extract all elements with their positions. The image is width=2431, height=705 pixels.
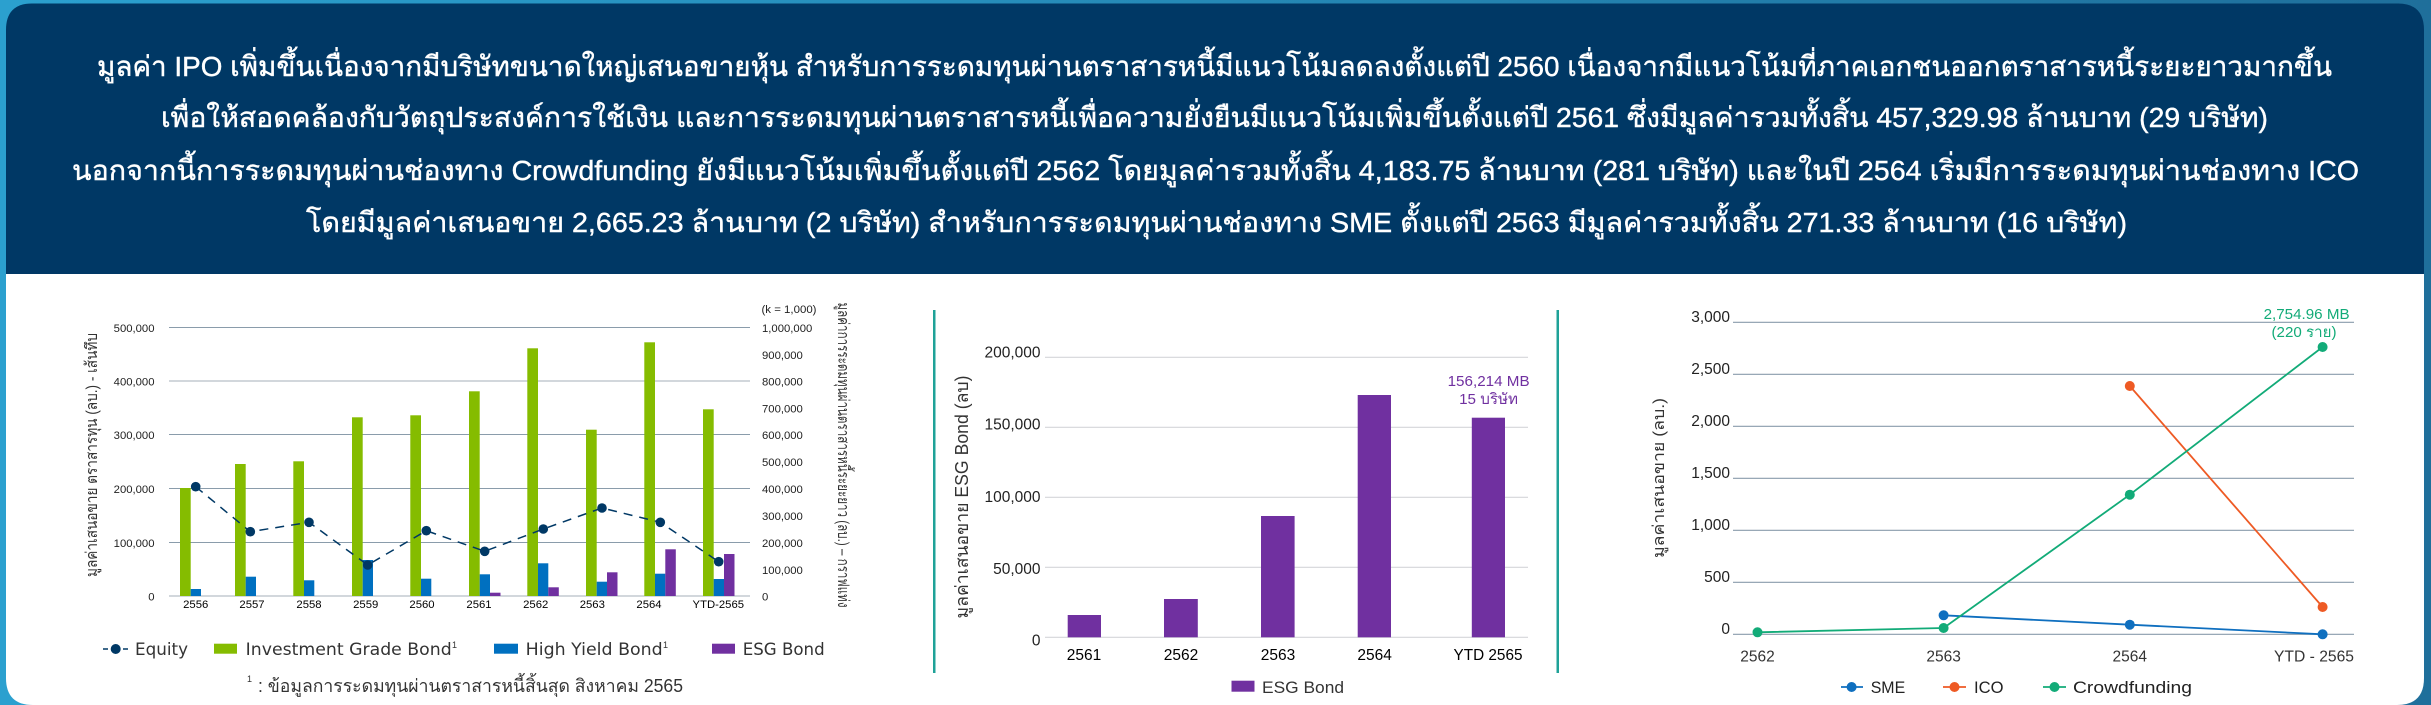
SME line <box>1939 610 2328 639</box>
footnote: : ข้อมูลการระดมทุนผ่านตราสารหนี้สิ้นสุด สิงหาคม 2565 <box>258 673 683 697</box>
summary text line 2: เพื่อให้สอดคล้องกับวัตถุประสงค์การใช้เงิน และการระดมทุนผ่านตราสารหนี้เพื่อความยั่งยืนมีแนวโน้มเพิ่มขึ้นตั้งแต่ปี 2561 ซึ่งมีมูลค่ารวมทั้งสิ้น 457,329.98 ล้านบาท (29 บริษัท) <box>161 97 2268 135</box>
y axis labels: 500 <box>1704 569 1730 586</box>
left axis title: มูลค่าเสนอขาย ตราสารทุน (ลบ.) - เส้นทึบ <box>83 333 102 577</box>
callout: 2565 value: 156,214 MB <box>1448 373 1530 390</box>
summary text line 3: นอกจากนี้การระดมทุนผ่านช่องทาง Crowdfunding ยังมีแนวโน้มเพิ่มขึ้นตั้งแต่ปี 2562 โดยมูลค่ารวมทั้งสิ้น 4,183.75 ล้านบาท (281 บริษัท) และในปี 2564 เริ่มมีการระดมทุนผ่านช่องทาง ICO <box>72 150 2359 188</box>
legend: SME <box>1871 678 1905 697</box>
x axis years: 2557 <box>239 599 265 611</box>
y axis labels: 150,000 <box>984 416 1041 434</box>
x axis years: 2561 <box>466 599 492 611</box>
legend: 1 <box>663 640 668 650</box>
x axis years: 2561 <box>1067 647 1101 664</box>
right axis labels: 600,000 <box>762 430 803 442</box>
legend: Investment Grade Bond <box>246 640 452 660</box>
panel: ESG bond bar chart <box>933 310 1559 697</box>
y axis labels: 200,000 <box>984 344 1041 362</box>
left axis labels <box>114 323 154 604</box>
x axis years: 2563 <box>580 599 605 611</box>
right teal divider <box>1556 310 1559 673</box>
x axis years: 2564 <box>636 599 662 611</box>
x axis years: YTD-2565 <box>693 599 744 611</box>
ESG bars <box>1068 395 1505 637</box>
y axis labels: 1,000 <box>1691 517 1730 534</box>
panel: equity and bond combo chart <box>83 302 855 697</box>
y axis labels: 2,000 <box>1691 413 1730 430</box>
x axis years: 2562 <box>1740 648 1775 666</box>
left axis labels: 500,000 <box>114 323 154 335</box>
high yield bond bars <box>191 560 724 596</box>
x axis years: YTD - 2565 <box>2274 648 2354 666</box>
legend: ICO <box>1974 678 2004 697</box>
summary text line 1: มูลค่า IPO เพิ่มขึ้นเนื่องจากมีบริษัทขนาดใหญ่เสนอขายหุ้น สำหรับการระดมทุนผ่านตราสารหนี้มีแนวโน้มลดลงตั้งแต่ปี 2560 เนื่องจากมีแนวโน้มที่ภาคเอกชนออกตราสารหนี้ระยะยาวมากขึ้น <box>97 46 2332 84</box>
y axis labels: 2,500 <box>1691 361 1730 378</box>
y axis labels: 50,000 <box>993 561 1041 578</box>
equity dashed line <box>191 482 723 570</box>
x axis years: 2556 <box>183 599 208 611</box>
legend: 1 <box>452 640 457 650</box>
ICO line <box>2125 381 2328 612</box>
y axis labels: 1,500 <box>1691 465 1730 482</box>
x axis years <box>1740 648 2354 666</box>
x axis years: 2564 <box>2113 648 2147 666</box>
right axis labels: (k = 1,000) <box>762 304 817 316</box>
x axis years: 2559 <box>353 599 378 611</box>
callout: crowdfunding value <box>2264 307 2350 341</box>
x axis years: YTD 2565 <box>1454 647 1522 664</box>
x axis years: 2564 <box>1357 647 1392 664</box>
y axis labels: 100,000 <box>984 489 1041 506</box>
left teal divider <box>933 310 936 673</box>
x axis years: 2558 <box>296 599 322 611</box>
right axis labels: 900,000 <box>762 350 803 362</box>
left axis labels: 400,000 <box>114 377 154 389</box>
left axis labels: 300,000 <box>114 430 154 442</box>
left axis labels: 100,000 <box>114 538 154 550</box>
right axis labels: 1,000,000 <box>762 323 812 335</box>
right axis labels: 800,000 <box>762 377 803 389</box>
x axis years: 2563 <box>1926 648 1961 666</box>
panel: summary header <box>6 4 2424 274</box>
y axis title: มูลค่าเสนอขาย ESG Bond (ลบ) <box>952 376 973 618</box>
footnote: 1 <box>247 674 252 684</box>
left axis labels: 0 <box>148 592 154 604</box>
right axis labels: 400,000 <box>762 484 803 496</box>
right axis labels: 100,000 <box>762 565 803 577</box>
right axis labels <box>762 304 817 604</box>
y axis title: มูลค่าเสนอขาย (ลบ.) <box>1651 398 1669 558</box>
legend: ESG Bond <box>743 640 825 660</box>
legend <box>1841 678 2192 697</box>
crowdfunding line <box>1752 342 2328 637</box>
y axis labels: 3,000 <box>1691 309 1730 326</box>
legend: Equity <box>135 640 188 660</box>
callout: crowdfunding value: 2,754.96 MB <box>2264 307 2350 323</box>
legend: ESG Bond <box>1262 678 1344 697</box>
y axis labels: 0 <box>1721 621 1730 638</box>
panel: SME ICO crowdfunding line chart <box>1651 307 2354 697</box>
callout: crowdfunding value: (220 ราย) <box>2272 325 2336 341</box>
legend <box>103 640 825 660</box>
legend: Crowdfunding <box>2073 678 2192 697</box>
x axis years: 2562 <box>1164 647 1198 664</box>
investment grade bond bars <box>180 342 714 596</box>
summary text line 4: โดยมีมูลค่าเสนอขาย 2,665.23 ล้านบาท (2 บริษัท) สำหรับการระดมทุนผ่านช่องทาง SME ตั้งแต่ปี 2563 มีมูลค่ารวมทั้งสิ้น 271.33 ล้านบาท (16 บริษัท) <box>306 202 2127 240</box>
y axis labels <box>984 344 1041 650</box>
legend: High Yield Bond <box>526 640 663 660</box>
right axis labels: 700,000 <box>762 403 803 415</box>
left axis labels: 200,000 <box>114 484 154 496</box>
callout: 2565 value: 15 บริษัท <box>1459 391 1518 408</box>
y axis labels: 0 <box>1032 632 1041 650</box>
right axis labels: 300,000 <box>762 511 803 523</box>
right axis labels: 0 <box>762 592 768 604</box>
right axis labels: 500,000 <box>762 457 803 469</box>
callout: 2565 value <box>1448 373 1530 408</box>
x axis years: 2562 <box>523 599 548 611</box>
x axis years: 2563 <box>1261 647 1295 664</box>
x axis years: 2560 <box>409 599 435 611</box>
ESG bond bars <box>490 549 734 596</box>
right axis labels: 200,000 <box>762 538 803 550</box>
x axis years <box>1067 647 1522 664</box>
white content panel <box>6 270 2424 705</box>
y axis labels <box>1691 309 1730 638</box>
x axis years <box>183 599 744 611</box>
